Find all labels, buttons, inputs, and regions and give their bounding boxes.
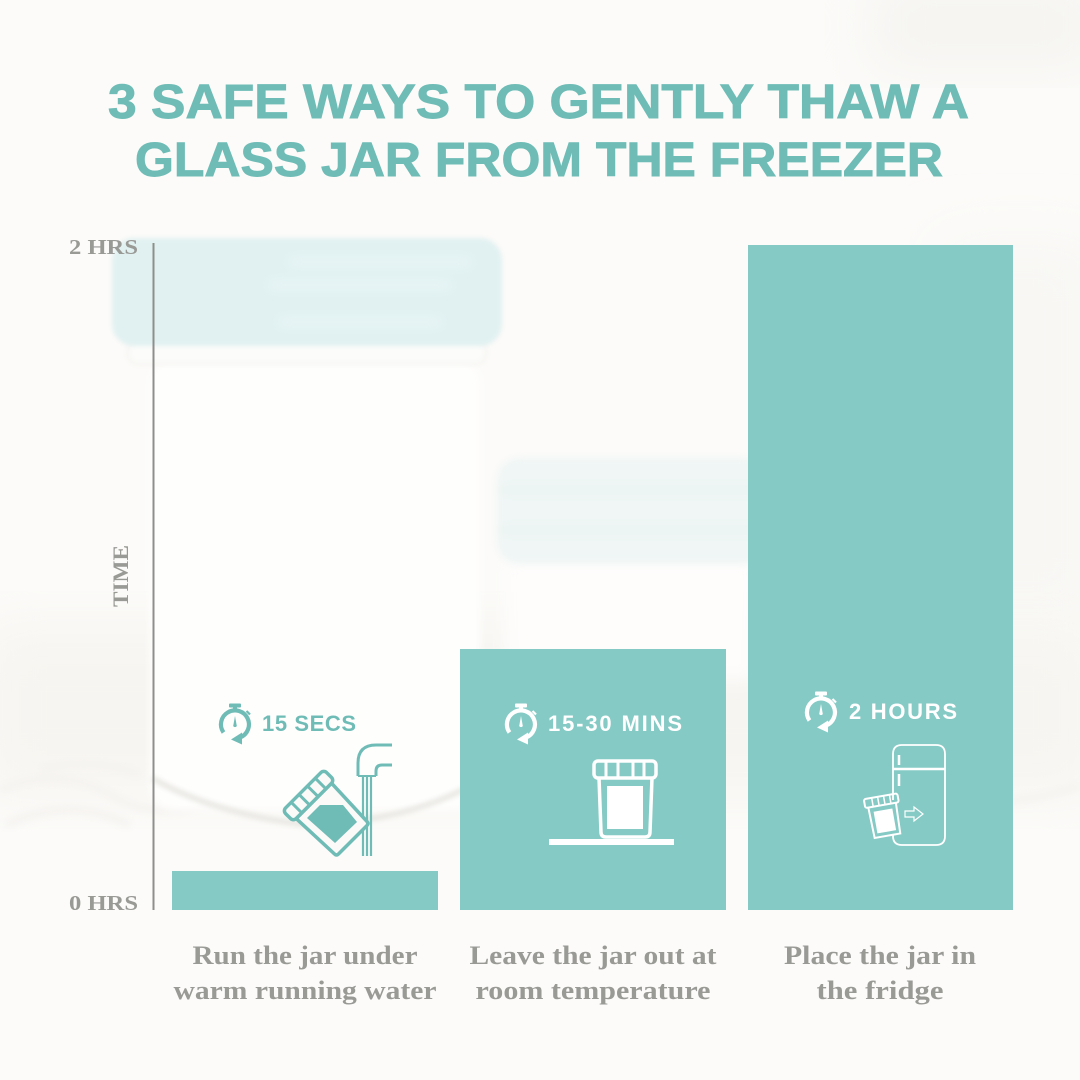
time label: 2 hours: 2 HOURS xyxy=(849,699,957,724)
caption: room temperature: room temperature xyxy=(476,976,710,1005)
caption: room temperature: Leave the jar out at xyxy=(470,941,717,970)
time label: 2 hours xyxy=(807,692,957,732)
water streams xyxy=(363,776,371,856)
time label: 15 secs: 15 SECS xyxy=(262,711,356,736)
title: GLASS JAR FROM THE FREEZER xyxy=(135,134,943,187)
icon: stopwatch xyxy=(507,704,536,744)
bar: fridge xyxy=(748,245,1013,910)
time label: 15-30 mins: 15-30 MINS xyxy=(548,711,682,736)
caption: running water: Run the jar under xyxy=(192,941,418,970)
title xyxy=(108,76,969,187)
axis title: time: TIME xyxy=(108,545,133,607)
time label: 15-30 mins xyxy=(507,704,682,744)
front jar xyxy=(150,360,480,810)
icon: jar under running tap xyxy=(283,745,392,860)
jar contents xyxy=(307,805,357,843)
axis label: 0 hrs: 0 HRS xyxy=(69,891,138,915)
title: 3 SAFE WAYS TO GENTLY THAW A xyxy=(108,76,969,129)
bar: room temperature xyxy=(460,649,726,910)
icon: jar going into fridge xyxy=(864,745,945,845)
caption: fridge xyxy=(784,941,977,1005)
icon: stopwatch xyxy=(221,704,250,744)
time label: 15 secs xyxy=(221,704,356,744)
jar body xyxy=(283,770,373,860)
tap xyxy=(358,745,392,776)
icon: stopwatch xyxy=(807,692,836,732)
bar: running water xyxy=(172,871,438,910)
axis label: 2 hrs: 2 HRS xyxy=(69,235,138,259)
caption: running water: warm running water xyxy=(174,976,436,1005)
caption: fridge: the fridge xyxy=(816,976,944,1005)
caption: running water xyxy=(174,941,436,1005)
icon: jar on counter xyxy=(549,761,674,845)
caption: fridge: Place the jar in xyxy=(784,941,977,970)
rear jar xyxy=(505,560,755,680)
caption: room temperature xyxy=(470,941,717,1005)
